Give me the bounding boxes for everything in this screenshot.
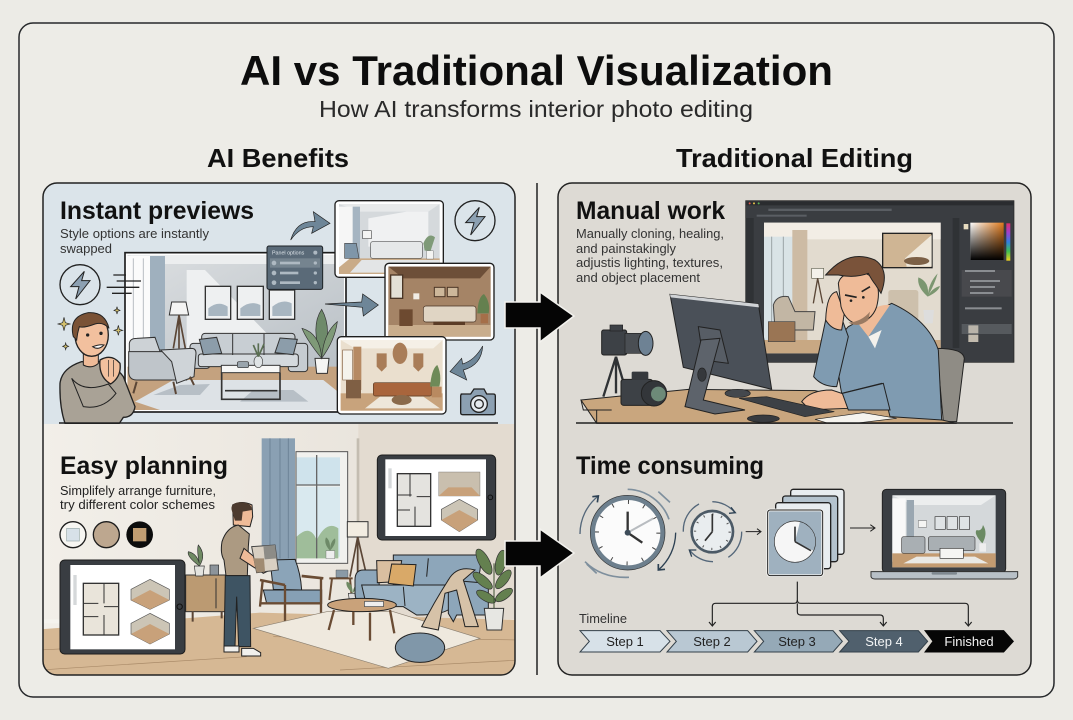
text: manual work description: and object placement [576, 270, 700, 285]
camera on desk [621, 372, 667, 406]
heading: Easy planning: Easy planning [60, 452, 228, 480]
character: happy man [58, 307, 135, 423]
heading: Manual work: Manual work [576, 197, 725, 225]
arrow to rustic style [325, 294, 378, 316]
text: easy planning description: try different color schemes [60, 497, 216, 512]
text: manual work description: adjustis lighting, textures, [576, 255, 723, 270]
coffee table [328, 598, 396, 641]
timeline labels: Step 3 [778, 634, 816, 649]
arrow to frames [746, 529, 761, 535]
label: Timeline: Timeline [579, 611, 627, 626]
text: instant previews description: Style options are instantly [60, 226, 209, 241]
heading: Time consuming: Time consuming [576, 452, 764, 480]
scene: instant previews [58, 201, 495, 423]
style thumbnail: rustic [385, 263, 494, 340]
text: instant previews description: swapped [60, 241, 112, 256]
color swatches [60, 521, 153, 548]
heading: AI Benefits: AI Benefits [207, 143, 349, 173]
sofa [355, 555, 488, 630]
scene: manual work [581, 201, 1014, 423]
main room illustration [125, 253, 346, 412]
timeline labels [606, 634, 994, 649]
heading: Traditional Editing: Traditional Editing [676, 143, 913, 173]
timeline labels: Finished [944, 634, 994, 649]
subtitle: How AI transforms interior photo editing [319, 96, 753, 122]
arrow to laptop [850, 525, 875, 531]
potted plant [470, 547, 515, 630]
arrow to boho style [450, 346, 483, 380]
timeline labels: Step 1 [606, 634, 644, 649]
icon: laptop with room [871, 489, 1018, 579]
step 1 [580, 631, 670, 652]
tablet: wall floor plan [377, 455, 496, 540]
icon: frame stack with clock [768, 489, 844, 576]
arrow to modern style [291, 212, 330, 240]
panel: traditional editing [558, 183, 1031, 675]
sofa [190, 333, 308, 372]
desk [581, 389, 957, 423]
panel divider [59, 422, 498, 424]
side table [328, 570, 355, 600]
armchair [260, 559, 323, 625]
floor lamp [169, 302, 189, 348]
text: manual work description: and painstakingly [576, 241, 676, 256]
keyboard and mouse [725, 389, 897, 423]
panel border [43, 183, 515, 675]
icon: camera [461, 389, 495, 415]
scene: easy planning [40, 424, 520, 683]
pouf [395, 633, 445, 662]
floor lamp [347, 522, 368, 577]
panel divider [576, 422, 1013, 424]
step 2 [667, 631, 757, 652]
rug [253, 612, 480, 668]
style thumbnail: modern [335, 201, 443, 277]
title: AI vs Traditional Visualization [240, 47, 833, 94]
wall and floor [40, 424, 520, 683]
tablet: floor plan and 3D views [60, 560, 185, 654]
man with samples [221, 502, 278, 656]
text: manual work description: Manually cloning, healing, [576, 226, 724, 241]
stressed man [802, 256, 942, 420]
chair [937, 348, 964, 422]
text: easy planning description: Simplifely arrange furniture, [60, 483, 216, 498]
timeline labels: Step 2 [693, 634, 731, 649]
text: instant previews description [60, 226, 209, 256]
timeline chevrons [580, 631, 1013, 652]
wall pictures [205, 286, 295, 319]
armchair [129, 337, 196, 394]
finished [925, 631, 1013, 652]
heading: Instant previews: Instant previews [60, 197, 254, 225]
icon: large clock [580, 489, 676, 577]
scene: time consuming [580, 489, 1018, 652]
style options menu: Panel options [272, 250, 305, 256]
icon: lightning left [60, 265, 141, 305]
step 3 [754, 631, 842, 652]
connector arrows to timeline [709, 582, 972, 626]
arrow: AI previews to manual work [505, 292, 574, 342]
monitor [670, 294, 772, 414]
arrow: AI planning to time consuming [505, 529, 574, 578]
sideboard [186, 545, 226, 622]
step 4 [840, 631, 928, 652]
camera on tripod [602, 325, 653, 397]
coffee table [221, 343, 280, 399]
text: easy planning description [60, 483, 216, 512]
window and curtain [262, 438, 348, 563]
panel: AI benefits [40, 183, 520, 683]
icon: lightning top right [455, 201, 495, 241]
timeline labels: Step 4 [865, 634, 903, 649]
style thumbnail: boho [337, 337, 446, 414]
center divider [536, 183, 538, 675]
icon: small clock [683, 502, 742, 562]
style options menu [267, 246, 323, 289]
plant [302, 309, 337, 373]
text: manual work description [576, 226, 724, 285]
photo editor window [746, 201, 1014, 362]
